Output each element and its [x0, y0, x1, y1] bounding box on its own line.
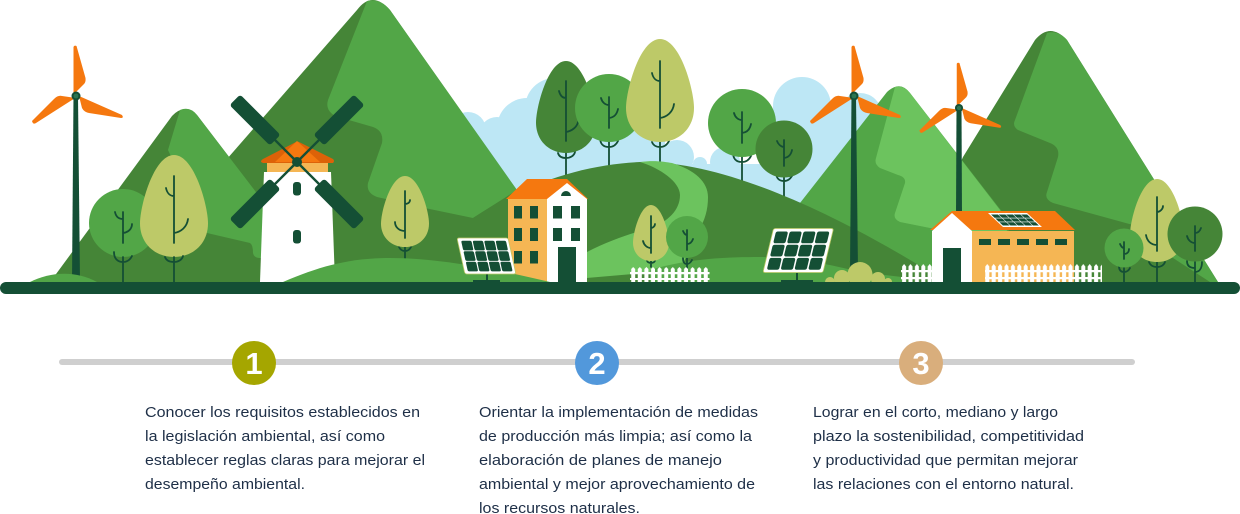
step 3 marker: 3	[912, 346, 930, 381]
trees: small pair by the road	[633, 205, 708, 268]
step 1 marker	[232, 341, 276, 385]
fence centre	[630, 267, 710, 282]
step 2 text: ambiental y mejor aprovechamiento de	[479, 477, 755, 493]
bush	[825, 262, 892, 287]
step 3 text: plazo la sostenibilidad, competitividad	[813, 429, 1084, 445]
step 3 text	[813, 405, 1084, 493]
step 3 text: y productividad que permitan mejorar	[813, 453, 1078, 469]
step 1 text	[145, 405, 425, 493]
wind turbine 2	[810, 46, 901, 272]
farmhouse	[930, 211, 1075, 282]
wind turbine 3	[919, 63, 1001, 216]
mountain: small left	[48, 109, 300, 285]
ground bar	[0, 282, 1240, 294]
step 2 text	[479, 405, 758, 514]
clouds	[450, 77, 882, 228]
step 2 text: Orientar la implementación de medidas	[479, 405, 758, 421]
trees: right group	[1104, 179, 1222, 282]
step 3 text: las relaciones con el entorno natural.	[813, 477, 1074, 493]
step 1 text: Conocer los requisitos establecidos en	[145, 405, 420, 421]
step 2 text: elaboración de planes de manejo	[479, 453, 722, 469]
tree: left circle	[89, 189, 157, 282]
step 2 marker	[575, 341, 619, 385]
timeline bar	[59, 359, 1135, 365]
step 1 text: la legislación ambiental, así como	[145, 429, 385, 445]
solar panel left	[457, 238, 516, 282]
hill: centre	[473, 162, 935, 285]
apartment building	[506, 179, 588, 282]
step 1 text: establecer reglas claras para mejorar el	[145, 453, 425, 469]
windmill	[230, 95, 364, 282]
step 2 text: de producción más limpia; así como la	[479, 429, 753, 445]
trees: centre group	[536, 39, 812, 197]
solar panel right	[763, 228, 834, 282]
step 3 text: Lograr en el corto, mediano y largo	[813, 405, 1058, 421]
mountain: large left	[117, 0, 583, 285]
mountain: far right	[900, 31, 1218, 285]
step 2 marker: 2	[588, 346, 606, 381]
hill: small left	[30, 274, 97, 285]
winding road and foreground hill	[540, 161, 708, 282]
tree: left olive	[140, 155, 208, 282]
wind turbine 1	[32, 46, 123, 282]
tree: olive beside windmill	[381, 176, 429, 259]
fences right	[901, 264, 1102, 282]
step 1 text: desempeño ambiental.	[145, 477, 305, 493]
hill: right lower	[650, 257, 902, 285]
step 1 marker: 1	[245, 346, 263, 381]
mountain: middle right	[760, 86, 1010, 285]
hill: windmill foreground	[283, 258, 550, 285]
step 3 marker	[899, 341, 943, 385]
